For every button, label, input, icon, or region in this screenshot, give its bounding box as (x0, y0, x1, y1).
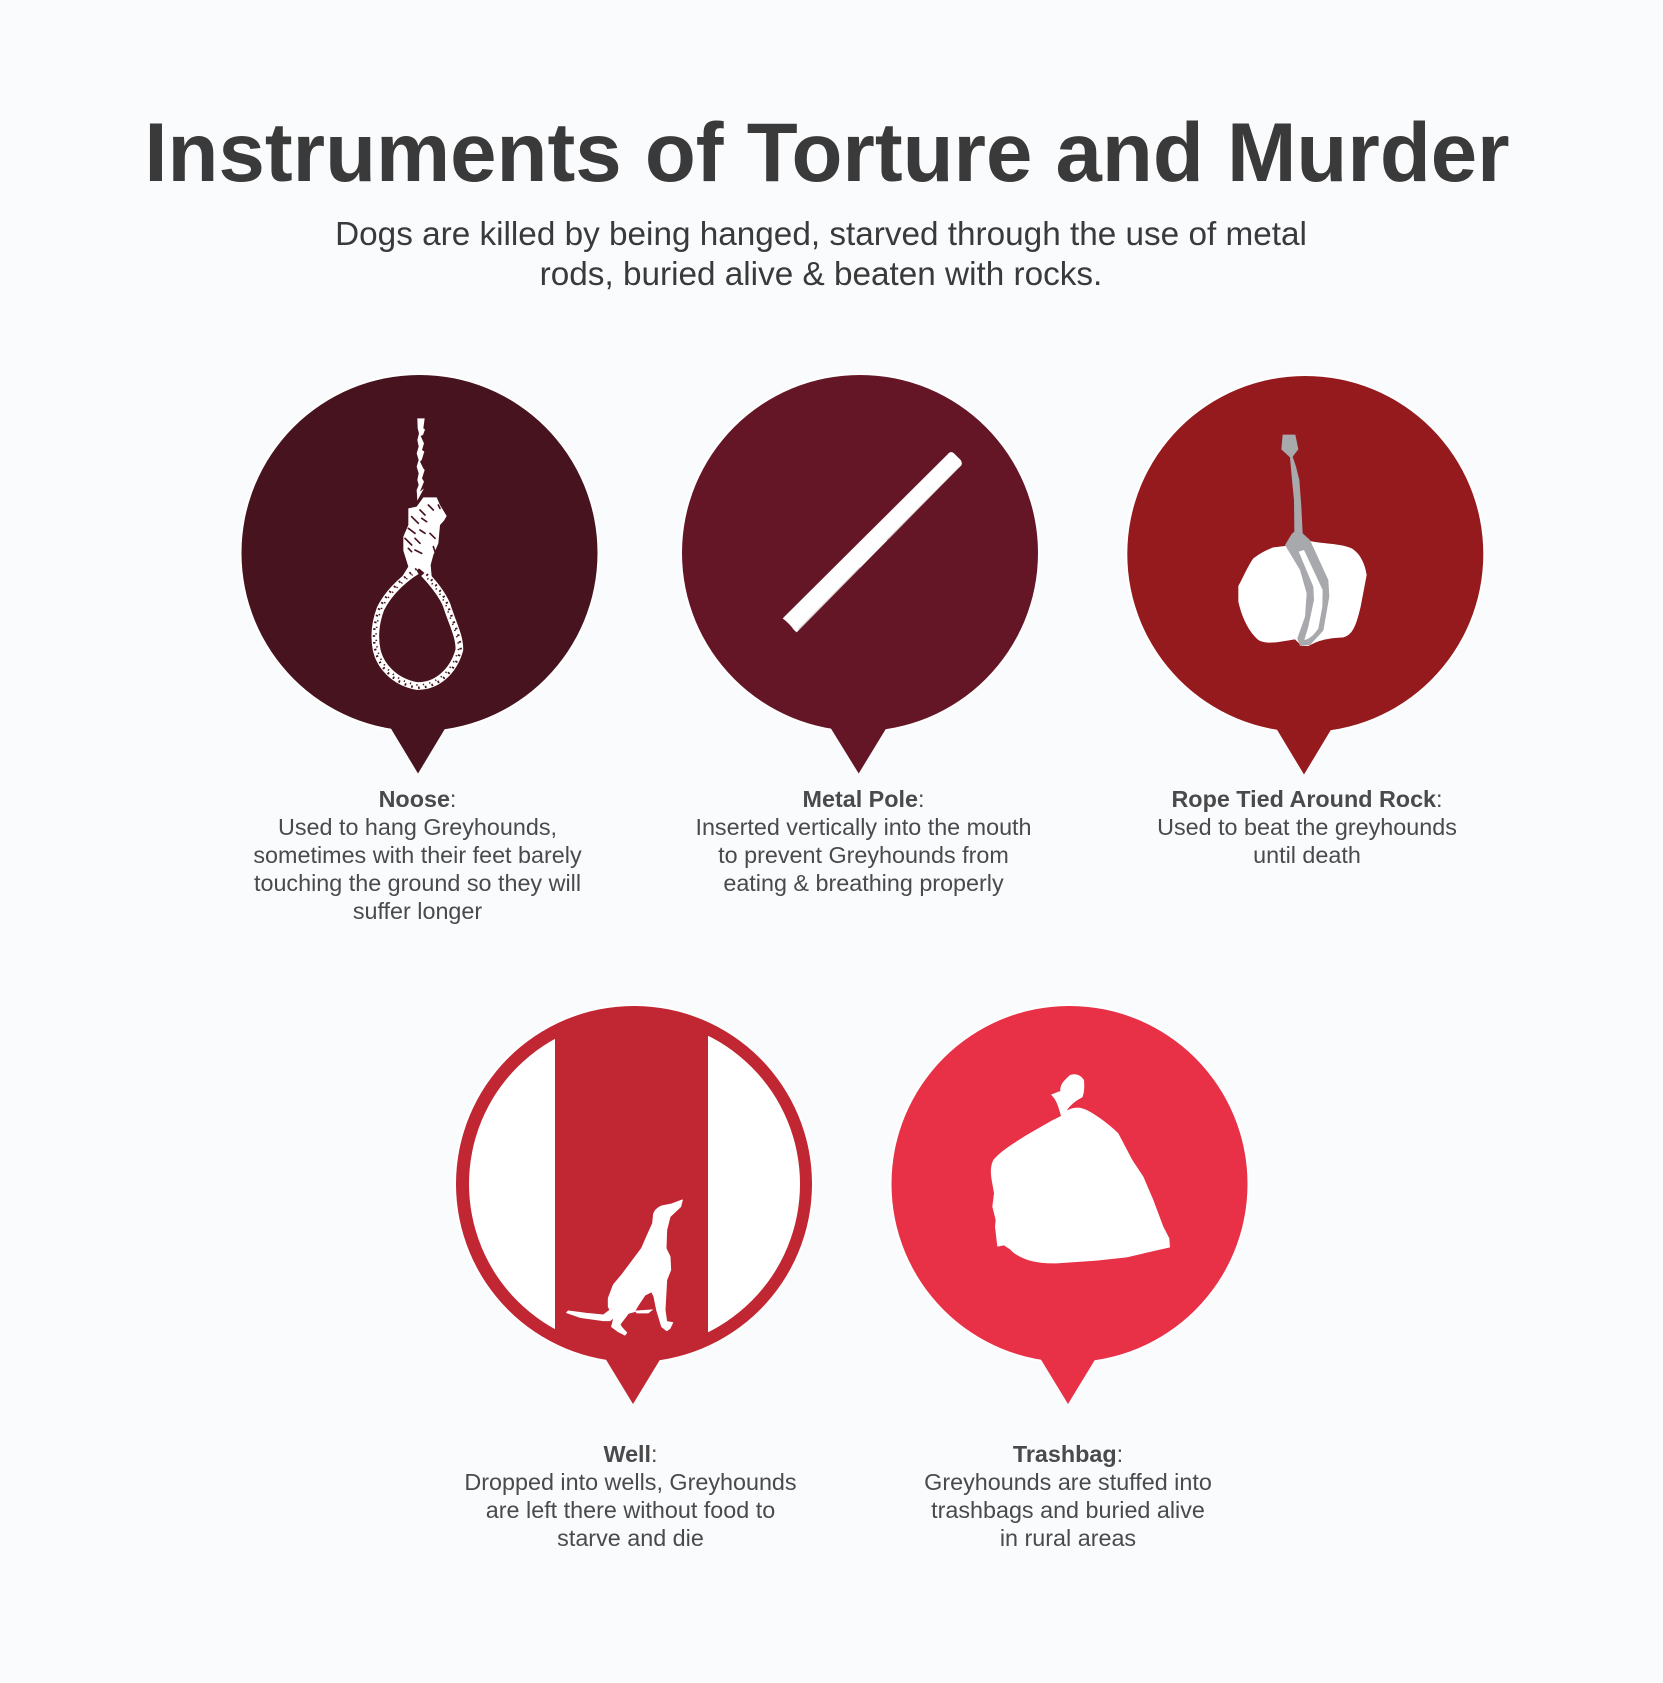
caption: trashbag: in rural areas (1000, 1525, 1136, 1551)
caption: trashbag: Greyhounds are stuffed into (924, 1469, 1212, 1495)
caption: well: are left there without food to (486, 1497, 775, 1523)
caption: noose: Noose: (379, 786, 456, 812)
subtitle (335, 216, 1307, 293)
caption: rope tied around rock: until death (1253, 842, 1361, 868)
panel: well (454, 1004, 814, 1551)
subtitle: Dogs are killed by being hanged, starved through the use of metal (335, 216, 1307, 253)
icon: dog in well (567, 1200, 682, 1335)
caption: noose: suffer longer (353, 898, 482, 924)
caption: metal pole (695, 786, 1032, 896)
panel: rope tied around rock (1125, 374, 1485, 868)
caption: well: starve and die (557, 1525, 704, 1551)
caption: well: Well: (603, 1441, 658, 1467)
panel: metal pole (680, 373, 1040, 896)
caption: metal pole: Metal Pole: (803, 786, 924, 812)
title: Instruments of Torture and Murder (144, 106, 1510, 199)
panel: trashbag (890, 1004, 1250, 1551)
panel: noose (240, 373, 600, 924)
caption: metal pole: Inserted vertically into the mouth (695, 814, 1032, 840)
caption: trashbag: trashbags and buried alive (931, 1497, 1205, 1523)
icon: trashbag (991, 1074, 1170, 1263)
caption: noose: touching the ground so they will (254, 870, 581, 896)
icon: metal pole (783, 452, 962, 632)
caption: rope tied around rock: Rope Tied Around Rock: (1171, 786, 1443, 812)
caption: noose (253, 786, 582, 924)
caption: well (464, 1441, 797, 1551)
caption: metal pole: to prevent Greyhounds from (718, 842, 1009, 868)
caption: well: Dropped into wells, Greyhounds (464, 1469, 797, 1495)
caption: rope tied around rock (1157, 786, 1457, 868)
icon: rope and rock (1238, 435, 1367, 646)
caption: rope tied around rock: Used to beat the greyhounds (1157, 814, 1457, 840)
caption: trashbag: Trashbag: (1013, 1441, 1123, 1467)
caption: noose: sometimes with their feet barely (253, 842, 582, 868)
caption: noose: Used to hang Greyhounds, (278, 814, 557, 840)
marker: metal pole pin (680, 373, 1040, 774)
marker: rock pin (1125, 374, 1485, 774)
marker: trashbag pin (890, 1004, 1250, 1404)
caption: trashbag (924, 1441, 1212, 1551)
subtitle: rods, buried alive & beaten with rocks. (540, 256, 1102, 293)
marker: noose pin (240, 373, 600, 774)
caption: metal pole: eating & breathing properly (723, 870, 1004, 896)
icon: noose (374, 418, 461, 688)
marker: well pin (454, 1004, 814, 1404)
